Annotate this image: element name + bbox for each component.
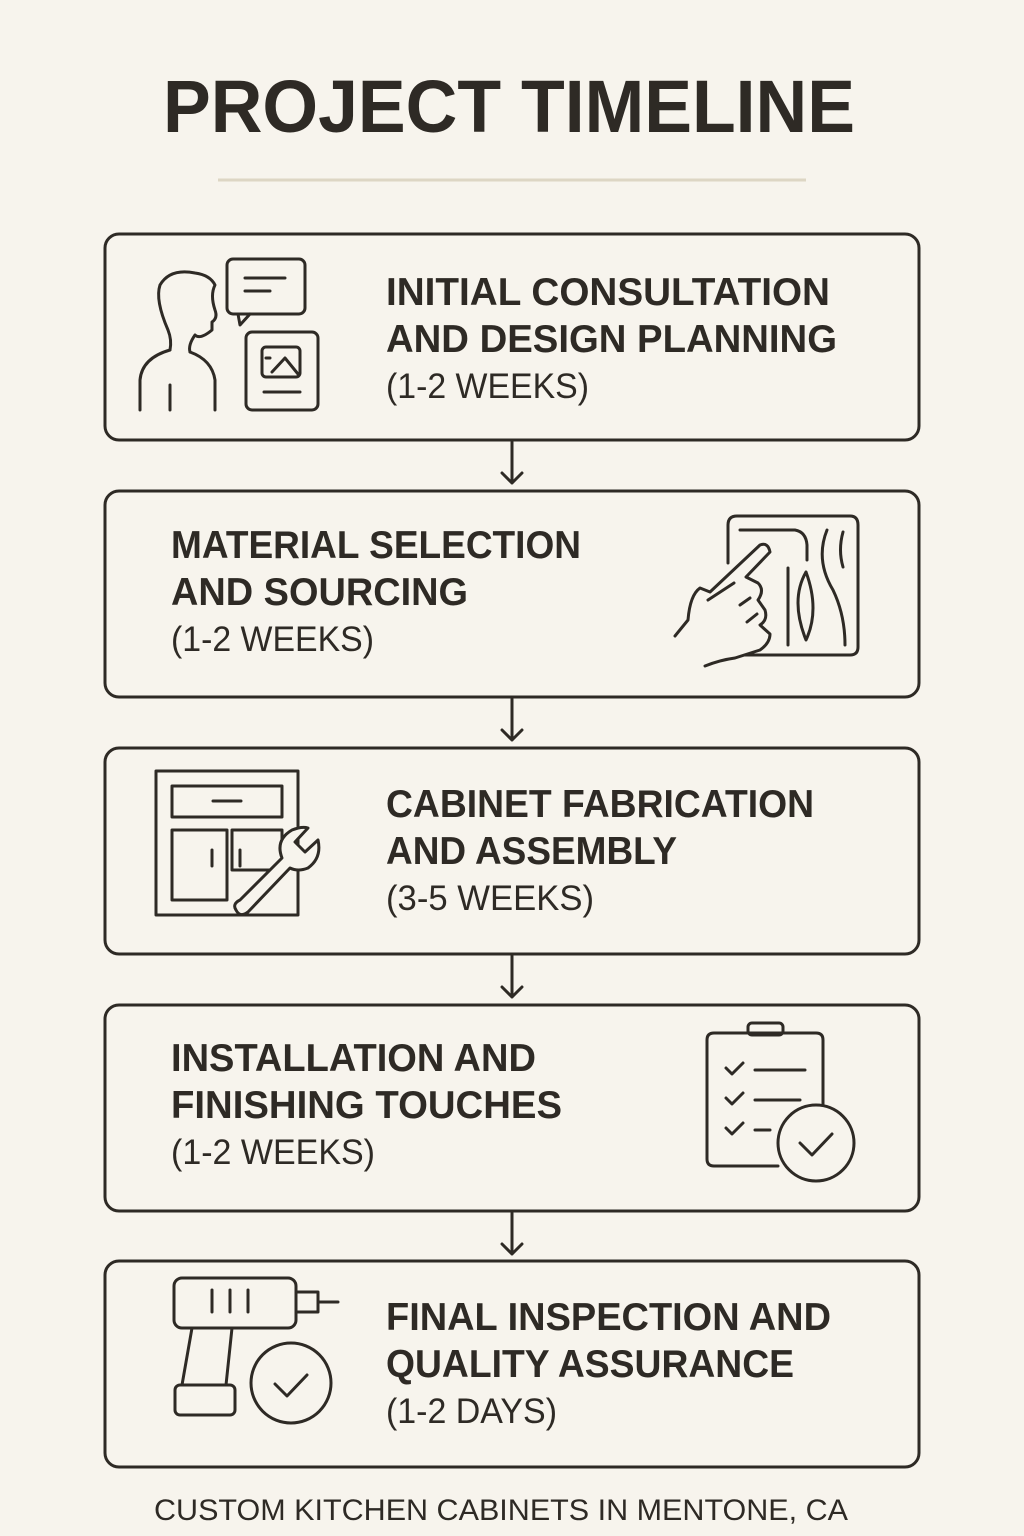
panel: step 5: [105, 1261, 919, 1467]
text: step 3: CABINET FABRICATION: [386, 783, 814, 826]
arrow 4: [502, 1213, 522, 1254]
text: step 1: [386, 271, 837, 406]
panel: step 3: [105, 748, 919, 954]
icon: drill check: [174, 1278, 338, 1423]
text: step 5: FINAL INSPECTION AND: [386, 1296, 831, 1339]
icon: cabinet wrench: [156, 771, 319, 915]
text: step 1: INITIAL CONSULTATION: [386, 271, 830, 314]
text: step 1: (1-2 WEEKS): [386, 367, 589, 406]
text: step 2: MATERIAL SELECTION: [171, 524, 581, 567]
text: step 3: [386, 783, 814, 918]
arrow 3: [502, 956, 522, 997]
icon: material touch: [675, 516, 858, 666]
text: step 5: (1-2 DAYS): [386, 1392, 557, 1431]
panel: step 4: [105, 1005, 919, 1211]
title: PROJECT TIMELINE: [163, 65, 855, 148]
text: step 4: INSTALLATION AND: [171, 1037, 536, 1080]
text: step 3: (3-5 WEEKS): [386, 879, 594, 918]
icon: consultation: [140, 259, 318, 410]
text: step 3: AND ASSEMBLY: [386, 830, 677, 873]
icon: checklist clipboard: [707, 1023, 854, 1181]
text: step 4: [171, 1037, 562, 1172]
arrow 2: [502, 699, 522, 740]
footer: CUSTOM KITCHEN CABINETS IN MENTONE, CA: [154, 1494, 848, 1527]
text: step 5: [386, 1296, 831, 1431]
text: step 2: (1-2 WEEKS): [171, 620, 374, 659]
text: step 4: FINISHING TOUCHES: [171, 1084, 562, 1127]
text: step 4: (1-2 WEEKS): [171, 1133, 375, 1172]
text: step 2: [171, 524, 581, 659]
panel: step 2: [105, 491, 919, 697]
text: step 1: AND DESIGN PLANNING: [386, 318, 837, 361]
arrow 1: [502, 442, 522, 483]
panel: step 1: [105, 234, 919, 440]
text: step 5: QUALITY ASSURANCE: [386, 1343, 794, 1386]
text: step 2: AND SOURCING: [171, 571, 468, 614]
